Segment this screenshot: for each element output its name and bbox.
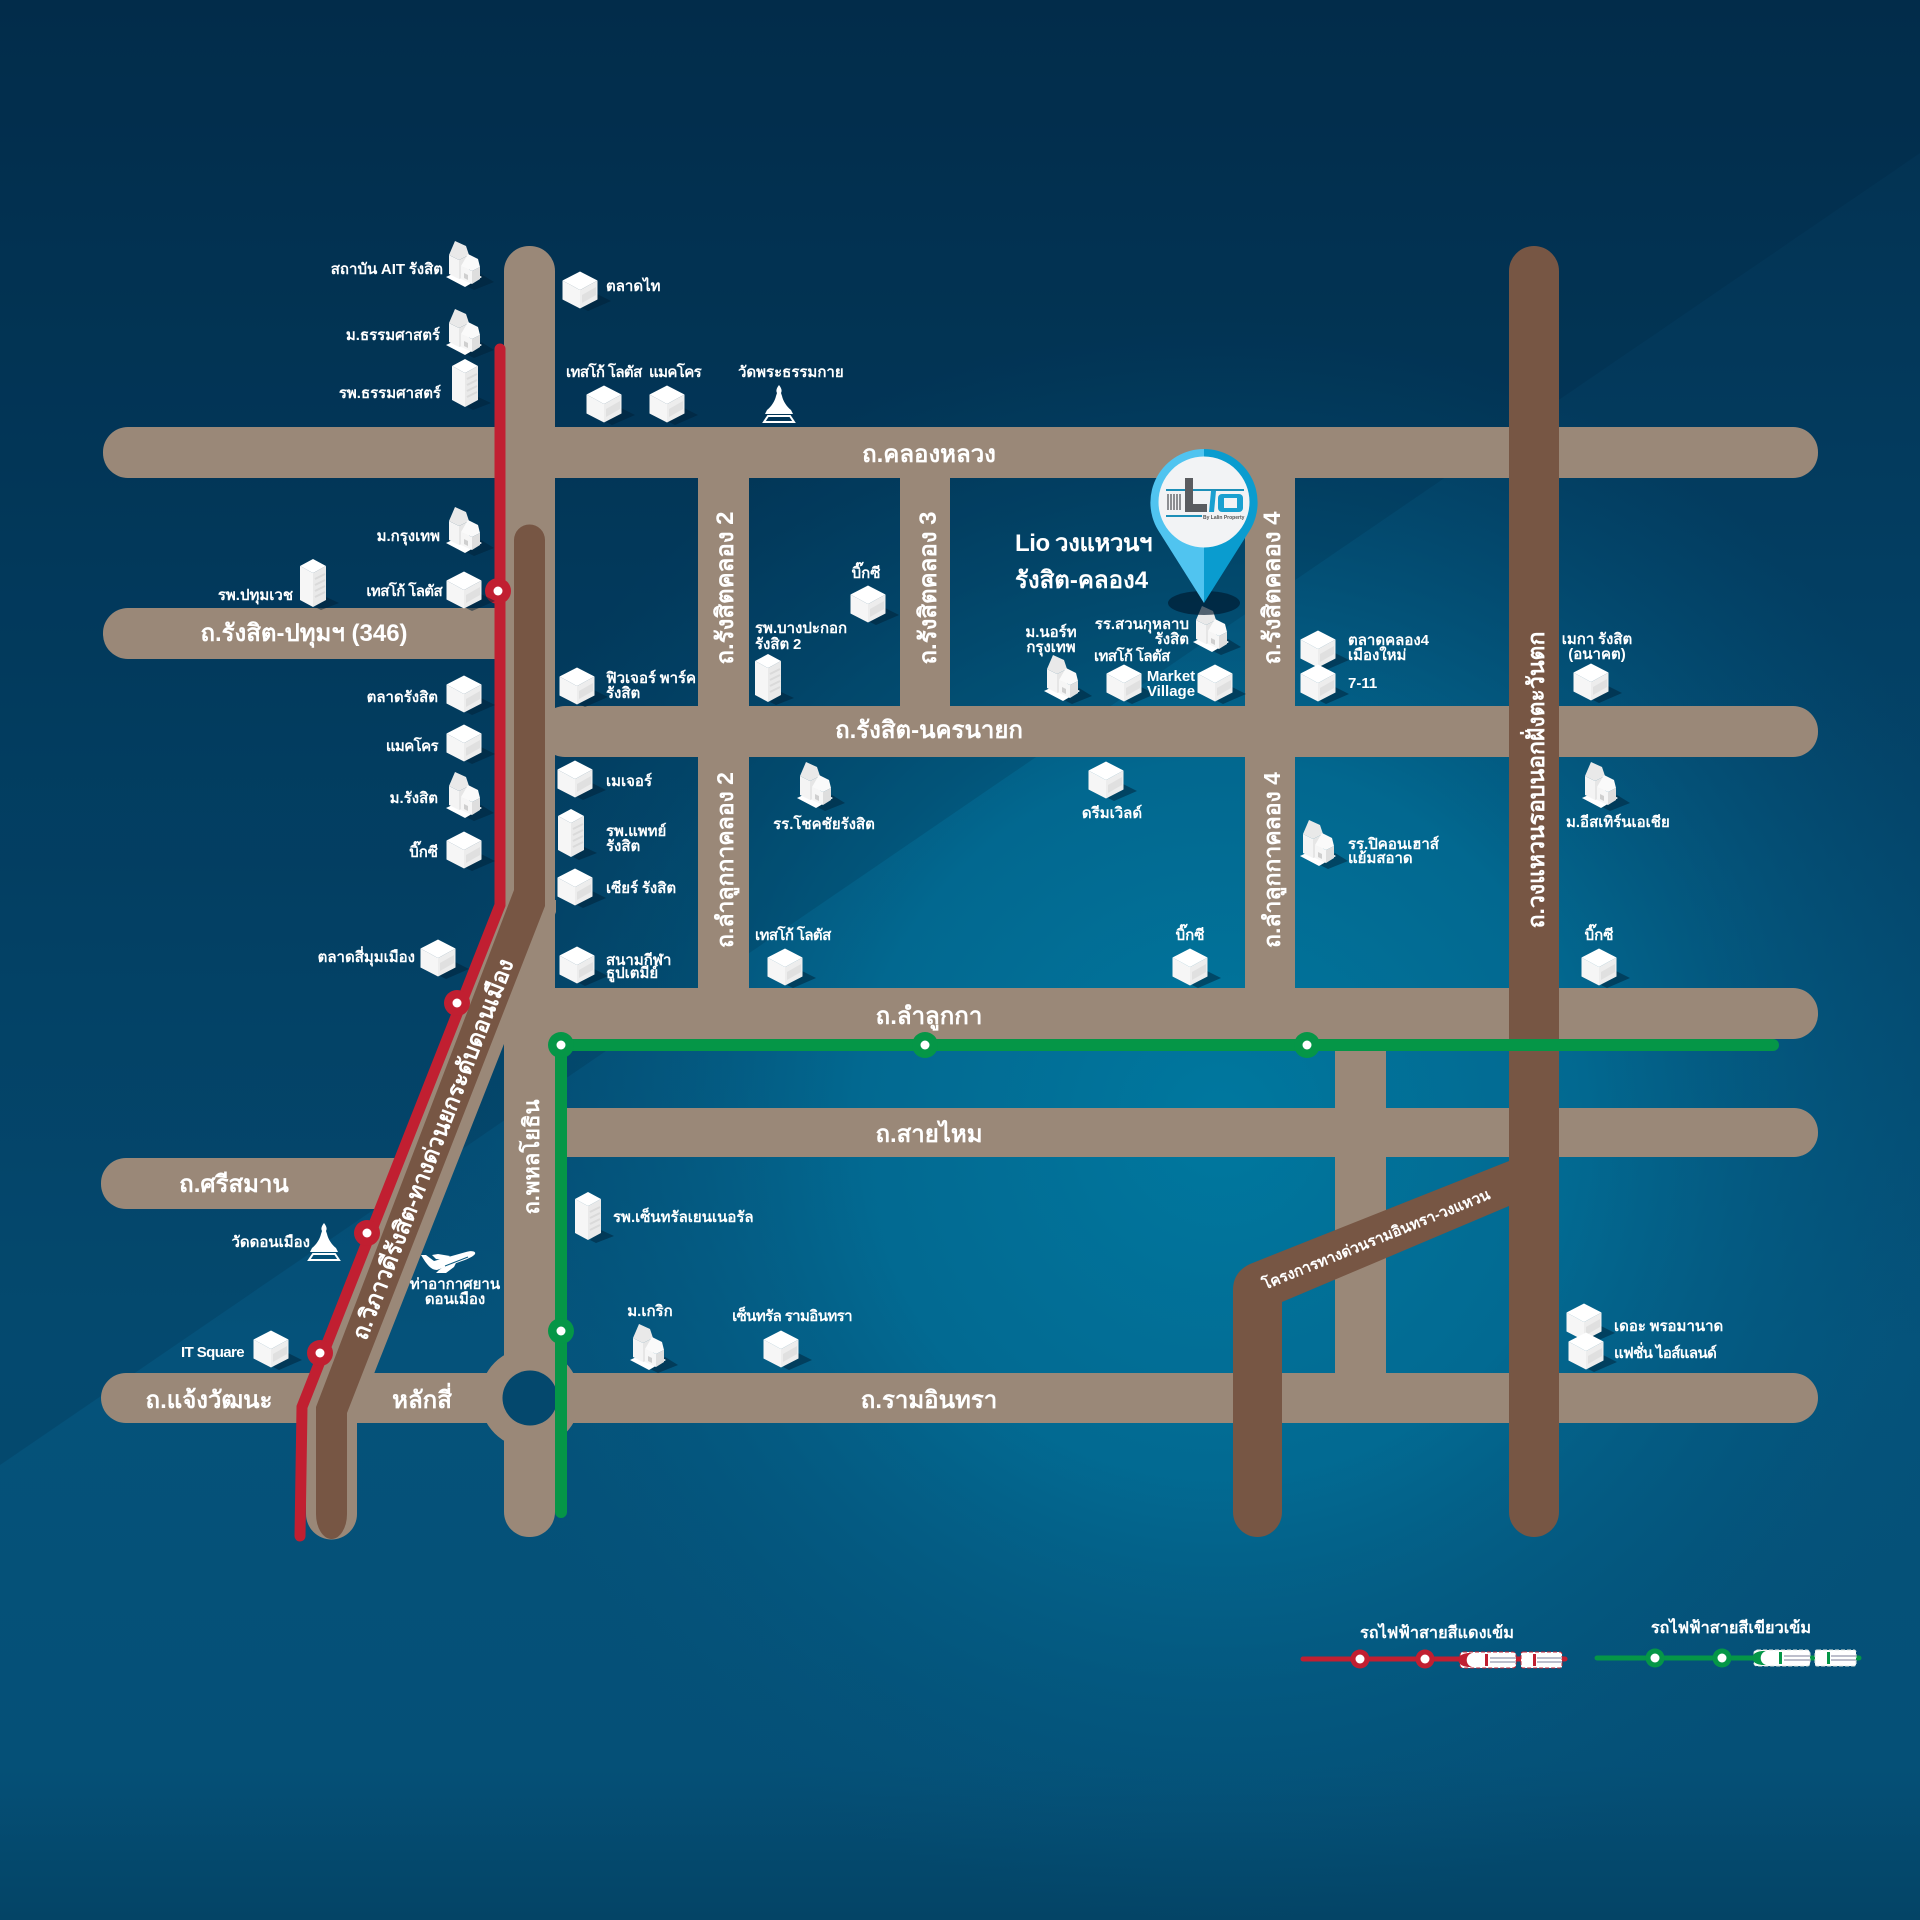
poi: รพ.บางปะกอก รังสิต 2: รังสิต 2 — [755, 635, 801, 653]
poi: ฟิวเจอร์ พาร์ค: ฟิวเจอร์ พาร์ค — [606, 669, 696, 687]
poi: ตลาดสี่มุมเมือง — [318, 940, 469, 979]
poi: สถาบัน AIT: สถาบัน AIT รังสิต — [331, 260, 443, 278]
road labels: โครงการทางด่วนรามอินทรา-วงแหวน — [1258, 1184, 1493, 1294]
project title: รังสิต-คลอง4 — [1015, 567, 1149, 594]
poi: ท่าอากาศยานดอนเมือง: ท่าอากาศยาน — [410, 1276, 501, 1293]
road labels: ถ.แจ้งวัฒนะ — [146, 1387, 272, 1414]
poi: สนามกีฬาธูปเตมีย์ — [560, 946, 671, 986]
poi: แมคโคร คลองหลวง: แมคโคร — [649, 362, 703, 381]
poi: เดอะ พรอมานาด: เดอะ พรอมานาด — [1614, 1318, 1723, 1335]
poi: รร.โชคชัยรังสิต: รร.โชคชัยรังสิต — [773, 814, 875, 833]
poi: เมกา รังสิต — [1562, 630, 1632, 703]
poi: ม.รังสิต — [390, 772, 494, 821]
poi: วัดดอนเมือง — [231, 1223, 339, 1260]
poi: แมคโคร — [386, 724, 495, 764]
roundabout centre — [502, 1370, 558, 1426]
poi: รพ.บางปะกอก รังสิต 2 — [755, 620, 847, 705]
road labels: ถ.ลำลูกกาคลอง 4 — [1259, 772, 1287, 948]
poi: ม.อีสเทิร์นเอเชีย — [1566, 762, 1670, 831]
location pin with Lio logo: By Lalin Property — [1203, 515, 1245, 521]
poi: Market Village: Village — [1147, 683, 1195, 700]
poi: รพ.แพทย์รังสิต — [558, 809, 666, 860]
poi: รพ.แพทย์รังสิต: รังสิต — [606, 837, 640, 855]
legend: red line — [1303, 1622, 1565, 1668]
poi: แฟชั่น ไอส์แลนด์ — [1568, 1332, 1717, 1372]
poi: เซ็นทรัล รามอินทรา: เซ็นทรัล รามอินทรา — [732, 1306, 852, 1325]
poi: แมคโคร คลองหลวง — [649, 362, 703, 425]
location pin with Lio logo — [1150, 449, 1258, 615]
road labels: ถ.วิภาวดีรังสิต-ทางด่วนยกระดับดอนเมือง — [347, 955, 518, 1343]
road labels: ถ.วงแหวนรอบนอกฝั่งตะวันตก — [1519, 632, 1549, 928]
poi: วัดพระธรรมกาย — [738, 364, 844, 422]
poi: แมคโคร: แมคโคร — [386, 736, 440, 755]
poi: Market Village: Market — [1147, 668, 1195, 685]
poi: ตลาดไท — [562, 272, 661, 311]
poi: แฟชั่น ไอส์แลนด์: แฟชั่น ไอส์แลนด์ — [1614, 1342, 1717, 1362]
poi: เซ็นทรัล รามอินทรา — [732, 1306, 852, 1370]
road labels: ถ.คลองหลวง — [862, 441, 996, 468]
expressway: Ram Inthra link — [1233, 1161, 1509, 1537]
poi: 7-11: 7-11 — [1348, 675, 1377, 692]
poi: บิ๊กซี ลำลูกกา คลอง 4 — [1172, 923, 1221, 988]
road labels: ถ.รังสิตคลอง 4 — [1259, 511, 1286, 664]
poi: ม.นอร์ทกรุงเทพ: กรุงเทพ — [1026, 639, 1076, 657]
green line — [561, 1045, 1773, 1512]
poi: ม.ธรรมศาสตร์ — [346, 309, 494, 358]
poi: 7-11 — [1300, 664, 1377, 704]
poi: รร.สวนกุหลาบรังสิต: รังสิต — [1155, 630, 1189, 648]
project title: Lio วงแหวนฯ — [1015, 530, 1152, 557]
poi: รพ.บางปะกอก รังสิต 2: รพ.บางปะกอก — [755, 620, 847, 637]
poi: รพ.เซ็นทรัลเยนเนอรัล — [575, 1192, 754, 1243]
poi: รพ.ธรรมศาสตร์: รพ.ธรรมศาสตร์ — [339, 384, 442, 402]
poi: เมกา รังสิต: เมกา รังสิต — [1562, 630, 1632, 648]
poi: ม.รังสิต: ม.รังสิต — [390, 789, 438, 807]
poi: บิ๊กซี: บิ๊กซี — [409, 840, 438, 861]
poi: สถาบัน AIT — [331, 241, 494, 290]
poi: รร.สวนกุหลาบรังสิต — [1095, 606, 1241, 655]
road network — [101, 246, 1818, 1540]
poi: รร.โชคชัยรังสิต — [773, 762, 875, 833]
poi: ม.อีสเทิร์นเอเชีย: ม.อีสเทิร์นเอเชีย — [1566, 813, 1670, 831]
poi: สนามกีฬาธูปเตมีย์: สนามกีฬา — [606, 952, 671, 969]
expressway: Vibhavadi — [316, 524, 545, 1539]
poi: บิ๊กซี ลำลูกกา — [1582, 923, 1630, 988]
poi: วัดดอนเมือง: วัดดอนเมือง — [231, 1234, 310, 1251]
road labels: ถ.ลำลูกกาคลอง 2 — [712, 772, 740, 948]
green line stations — [548, 1032, 1320, 1344]
poi: รพ.แพทย์รังสิต: รพ.แพทย์ — [606, 822, 666, 840]
poi: เทสโก้ โลตัส คลองหลวง — [566, 362, 643, 425]
poi: Market Village — [1147, 664, 1246, 704]
poi: รร.สวนกุหลาบรังสิต: รร.สวนกุหลาบ — [1095, 616, 1189, 634]
poi: เมกา รังสิต: (อนาคต) — [1568, 646, 1626, 663]
poi: IT Square — [181, 1330, 302, 1370]
poi: ตลาดไท: ตลาดไท — [606, 276, 661, 295]
road labels: ถ.ศรีสมาน — [179, 1171, 289, 1198]
road labels: หลักสี่ — [392, 1382, 452, 1414]
poi: รร.ปิคอนเฮาส์ แย้มสอาด: รร.ปิคอนเฮาส์ — [1348, 835, 1440, 853]
poi: เซียร์ รังสิต — [558, 868, 676, 908]
poi: เทสโก้ โลตัส นครนายก: เทสโก้ โลตัส — [1094, 646, 1171, 665]
poi: รพ.ปทุมเวช — [218, 559, 339, 610]
poi: รร.ปิคอนเฮาส์ แย้มสอาด — [1300, 820, 1440, 869]
poi: เดอะ พรอมานาด — [1566, 1304, 1723, 1343]
poi: ม.เกริก — [627, 1302, 678, 1373]
road labels: ถ.รังสิต-นครนายก — [835, 717, 1023, 744]
poi: บิ๊กซี — [409, 832, 495, 871]
poi: รพ.เซ็นทรัลเยนเนอรัล: รพ.เซ็นทรัลเยนเนอรัล — [613, 1207, 754, 1226]
poi: เทสโก้ โลตัส: เทสโก้ โลตัส — [366, 581, 443, 600]
expressway: outer ring — [1509, 246, 1559, 1537]
poi: เทสโก้ โลตัส — [366, 572, 495, 611]
poi: ตลาดรังสิต — [367, 676, 495, 715]
road labels: ถ.รังสิตคลอง 2 — [712, 512, 739, 664]
poi: บิ๊กซี คลอง 2 — [850, 561, 899, 625]
poi: รร.ปิคอนเฮาส์ แย้มสอาด: แย้มสอาด — [1348, 850, 1413, 867]
poi: ตลาดคลอง4 เมืองใหม่: ตลาดคลอง4 — [1348, 632, 1430, 649]
poi: ม.กรุงเทพ: ม.กรุงเทพ — [377, 528, 440, 546]
poi: ท่าอากาศยานดอนเมือง: ดอนเมือง — [425, 1291, 485, 1308]
poi: สนามกีฬาธูปเตมีย์: ธูปเตมีย์ — [606, 964, 658, 983]
legend: green line: รถไฟฟ้าสายสีเขียวเข้ม — [1651, 1617, 1811, 1637]
poi: เมเจอร์: เมเจอร์ — [606, 772, 653, 790]
poi: ม.นอร์ทกรุงเทพ — [1025, 623, 1092, 704]
road labels: ถ.สายไหม — [875, 1119, 983, 1148]
poi: เทสโก้ โลตัส ลำลูกกา — [755, 925, 832, 988]
poi: รพ.ธรรมศาสตร์ — [339, 359, 491, 410]
poi: เมเจอร์ — [558, 760, 653, 800]
poi: ม.เกริก: ม.เกริก — [627, 1302, 673, 1320]
red line stations — [307, 578, 511, 1366]
poi: บิ๊กซี ลำลูกกา คลอง 4: บิ๊กซี — [1176, 923, 1204, 944]
poi: ม.นอร์ทกรุงเทพ: ม.นอร์ท — [1025, 623, 1077, 641]
poi: เซียร์ รังสิต: เซียร์ รังสิต — [606, 879, 676, 897]
poi: ตลาดคลอง4 เมืองใหม่: เมืองใหม่ — [1348, 646, 1406, 664]
poi: วัดพระธรรมกาย: วัดพระธรรมกาย — [738, 364, 844, 381]
poi: เทสโก้ โลตัส คลองหลวง: เทสโก้ โลตัส — [566, 362, 643, 381]
poi: บิ๊กซี คลอง 2: บิ๊กซี — [852, 561, 880, 582]
poi: ตลาดสี่มุมเมือง: ตลาดสี่มุมเมือง — [318, 946, 415, 967]
poi: บิ๊กซี ลำลูกกา: บิ๊กซี — [1585, 923, 1613, 944]
poi: ดรีมเวิลด์: ดรีมเวิลด์ — [1082, 804, 1142, 822]
project title — [1015, 530, 1152, 594]
road labels: ถ.รามอินทรา — [861, 1387, 997, 1414]
poi: รพ.ปทุมเวช: รพ.ปทุมเวช — [218, 587, 293, 605]
poi: ม.ธรรมศาสตร์: ม.ธรรมศาสตร์ — [346, 326, 441, 344]
poi: IT Square: IT Square — [181, 1344, 244, 1361]
red line — [300, 349, 500, 1536]
legend: green line — [1597, 1617, 1859, 1668]
road labels — [146, 441, 1549, 1414]
road labels: ถ.รังสิตคลอง 3 — [915, 512, 942, 664]
road labels: ถ.ลำลูกกา — [876, 1003, 982, 1031]
legend: red line: รถไฟฟ้าสายสีแดงเข้ม — [1360, 1622, 1514, 1642]
poi: ดรีมเวิลด์ — [1082, 762, 1142, 822]
poi: ตลาดคลอง4 เมืองใหม่ — [1300, 630, 1430, 670]
poi: เทสโก้ โลตัส ลำลูกกา: เทสโก้ โลตัส — [755, 925, 832, 944]
poi: เทสโก้ โลตัส นครนายก — [1094, 646, 1171, 704]
poi: ตลาดรังสิต: ตลาดรังสิต — [367, 688, 438, 706]
road labels: ถ.รังสิต-ปทุมฯ (346) — [200, 620, 408, 649]
poi: ฟิวเจอร์ พาร์ค: รังสิต — [606, 684, 640, 702]
road labels: ถ.พหลโยธิน — [518, 1099, 544, 1215]
poi: ท่าอากาศยานดอนเมือง — [410, 1251, 501, 1308]
poi: ฟิวเจอร์ พาร์ค — [560, 668, 696, 707]
poi: ม.กรุงเทพ — [377, 507, 494, 556]
